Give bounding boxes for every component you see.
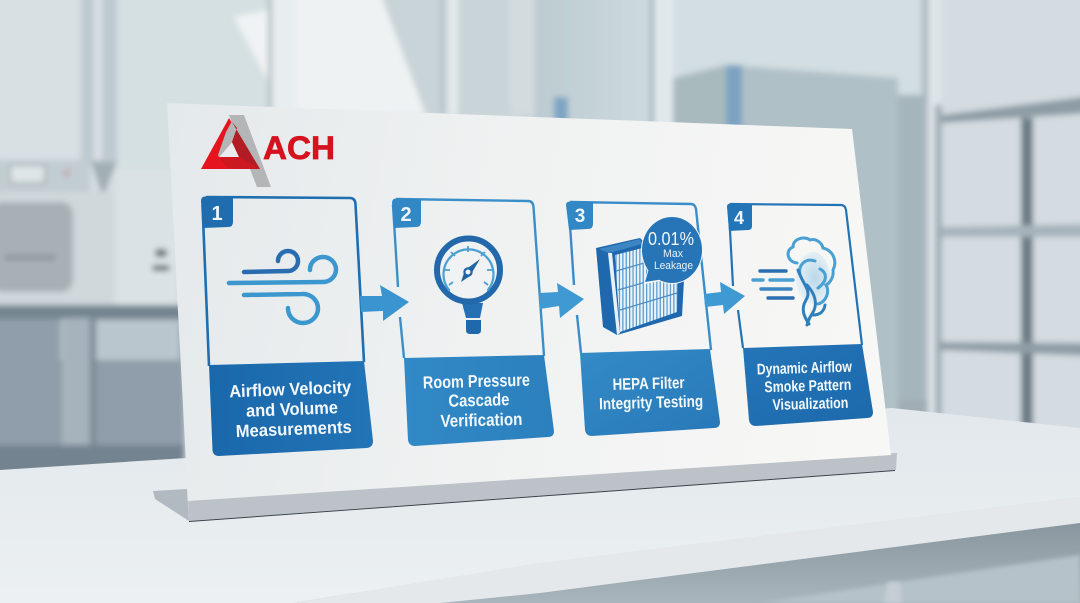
caption text: Measurements <box>235 417 352 441</box>
callout: 0.01% max leakage: Leakage <box>654 260 693 272</box>
number badge 4: 4 <box>734 208 744 228</box>
caption text: Dynamic Airflow <box>757 359 853 378</box>
card outline <box>569 202 711 353</box>
table: top surface <box>0 408 1080 603</box>
number badge 3 <box>566 202 593 230</box>
caption text: Integrity Testing <box>599 393 703 413</box>
caption text: Airflow Velocity <box>229 377 352 401</box>
caption text: Visualization <box>772 395 849 414</box>
callout: 0.01% max leakage <box>641 216 703 284</box>
panel: step 4 smoke visualization <box>727 204 873 426</box>
logo: ACH <box>201 115 335 187</box>
caption panel <box>209 361 373 456</box>
icon: smoke and airflow <box>753 238 835 325</box>
caption text: HEPA Filter <box>612 374 685 394</box>
logo icon: triangle <box>201 115 271 187</box>
callout: 0.01% max leakage: Max <box>663 248 683 260</box>
number badge 1 <box>201 196 233 228</box>
caption panel <box>743 344 873 426</box>
sign stand: metal base <box>153 453 897 522</box>
caption text: Smoke Pattern <box>764 377 852 396</box>
caption text: and Volume <box>246 397 339 421</box>
caption text <box>598 374 703 413</box>
panel: step 3 HEPA filter <box>566 202 720 436</box>
caption text: Cascade <box>448 389 510 411</box>
number badge 1: 1 <box>211 203 223 225</box>
number badge 3: 3 <box>575 206 585 227</box>
arrow: step 3 to 4 <box>704 282 745 314</box>
arrow: step 2 to 3 <box>539 283 584 318</box>
panel: step 2 pressure <box>392 198 554 446</box>
icon: wind <box>229 251 336 323</box>
table: front edge and underside <box>0 497 1080 603</box>
panel: step 1 airflow <box>201 196 373 456</box>
card outline <box>729 204 862 348</box>
caption panel <box>580 349 720 436</box>
logo wordmark: ACH <box>263 130 335 166</box>
icon: HEPA filter <box>596 238 684 335</box>
number badge 2 <box>392 198 421 228</box>
caption text <box>423 370 531 431</box>
arrow: step 1 to 2 <box>360 285 409 321</box>
card outline <box>393 199 544 358</box>
caption text: Room Pressure <box>423 370 530 392</box>
callout: 0.01% max leakage: 0.01% <box>648 229 694 249</box>
caption panel <box>404 355 554 446</box>
caption text <box>757 359 854 414</box>
number badge 2: 2 <box>400 204 412 226</box>
icon: pressure gauge <box>437 238 500 334</box>
sign board <box>167 103 891 501</box>
card outline <box>202 197 364 366</box>
number badge 4 <box>727 204 752 231</box>
caption text <box>229 377 353 441</box>
caption text: Verification <box>440 409 523 431</box>
